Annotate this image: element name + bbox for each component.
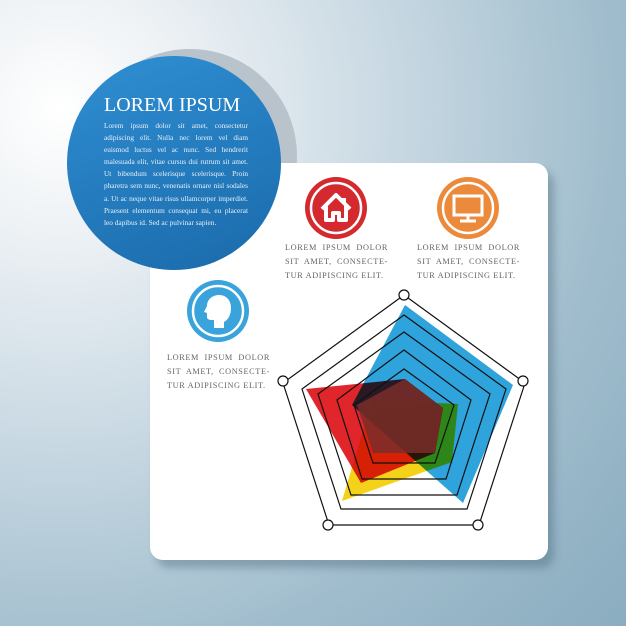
- text: head: LOREM IPSUM DOLOR: [167, 353, 270, 362]
- text: monitor: LOREM IPSUM DOLOR: [417, 243, 520, 252]
- text: home: [285, 243, 388, 280]
- text: head: TUR ADIPISCING ELIT.: [167, 381, 266, 390]
- shadow circle: [83, 49, 297, 263]
- text: head: SIT AMET, CONSECTE-: [167, 367, 270, 376]
- icon: monitor: [437, 177, 499, 239]
- text: monitor: TUR ADIPISCING ELIT.: [417, 271, 516, 280]
- white panel: [150, 163, 548, 560]
- blue circle callout: [67, 56, 281, 270]
- text: monitor: SIT AMET, CONSECTE-: [417, 257, 520, 266]
- text: home: TUR ADIPISCING ELIT.: [285, 271, 384, 280]
- text: head: [167, 353, 270, 390]
- text: home: SIT AMET, CONSECTE-: [285, 257, 388, 266]
- icon: head: [187, 280, 249, 342]
- title: LOREM IPSUM: [104, 94, 240, 116]
- icon: home: [305, 177, 367, 239]
- text: home: LOREM IPSUM DOLOR: [285, 243, 388, 252]
- text: monitor: [417, 243, 520, 280]
- body text: Lorem ipsum dolor sit amet, consectetur adipiscing elit. Nulla nec lorem vel diam euismod luctus vel ac nunc. Sed hendrerit malesuada elit, vitae cursus dui rutrum sit amet. Ut bibendum scelerisque scelerisque. Proin pharetra sem nunc, venenatis ornare nisl sodales a. Ut ac neque vitae risus ullamcorper imperdiet. Praesent elementum consequat mi, eu placerat leo dapibus id. Sed ac pulvinar sapien.: [104, 121, 248, 227]
